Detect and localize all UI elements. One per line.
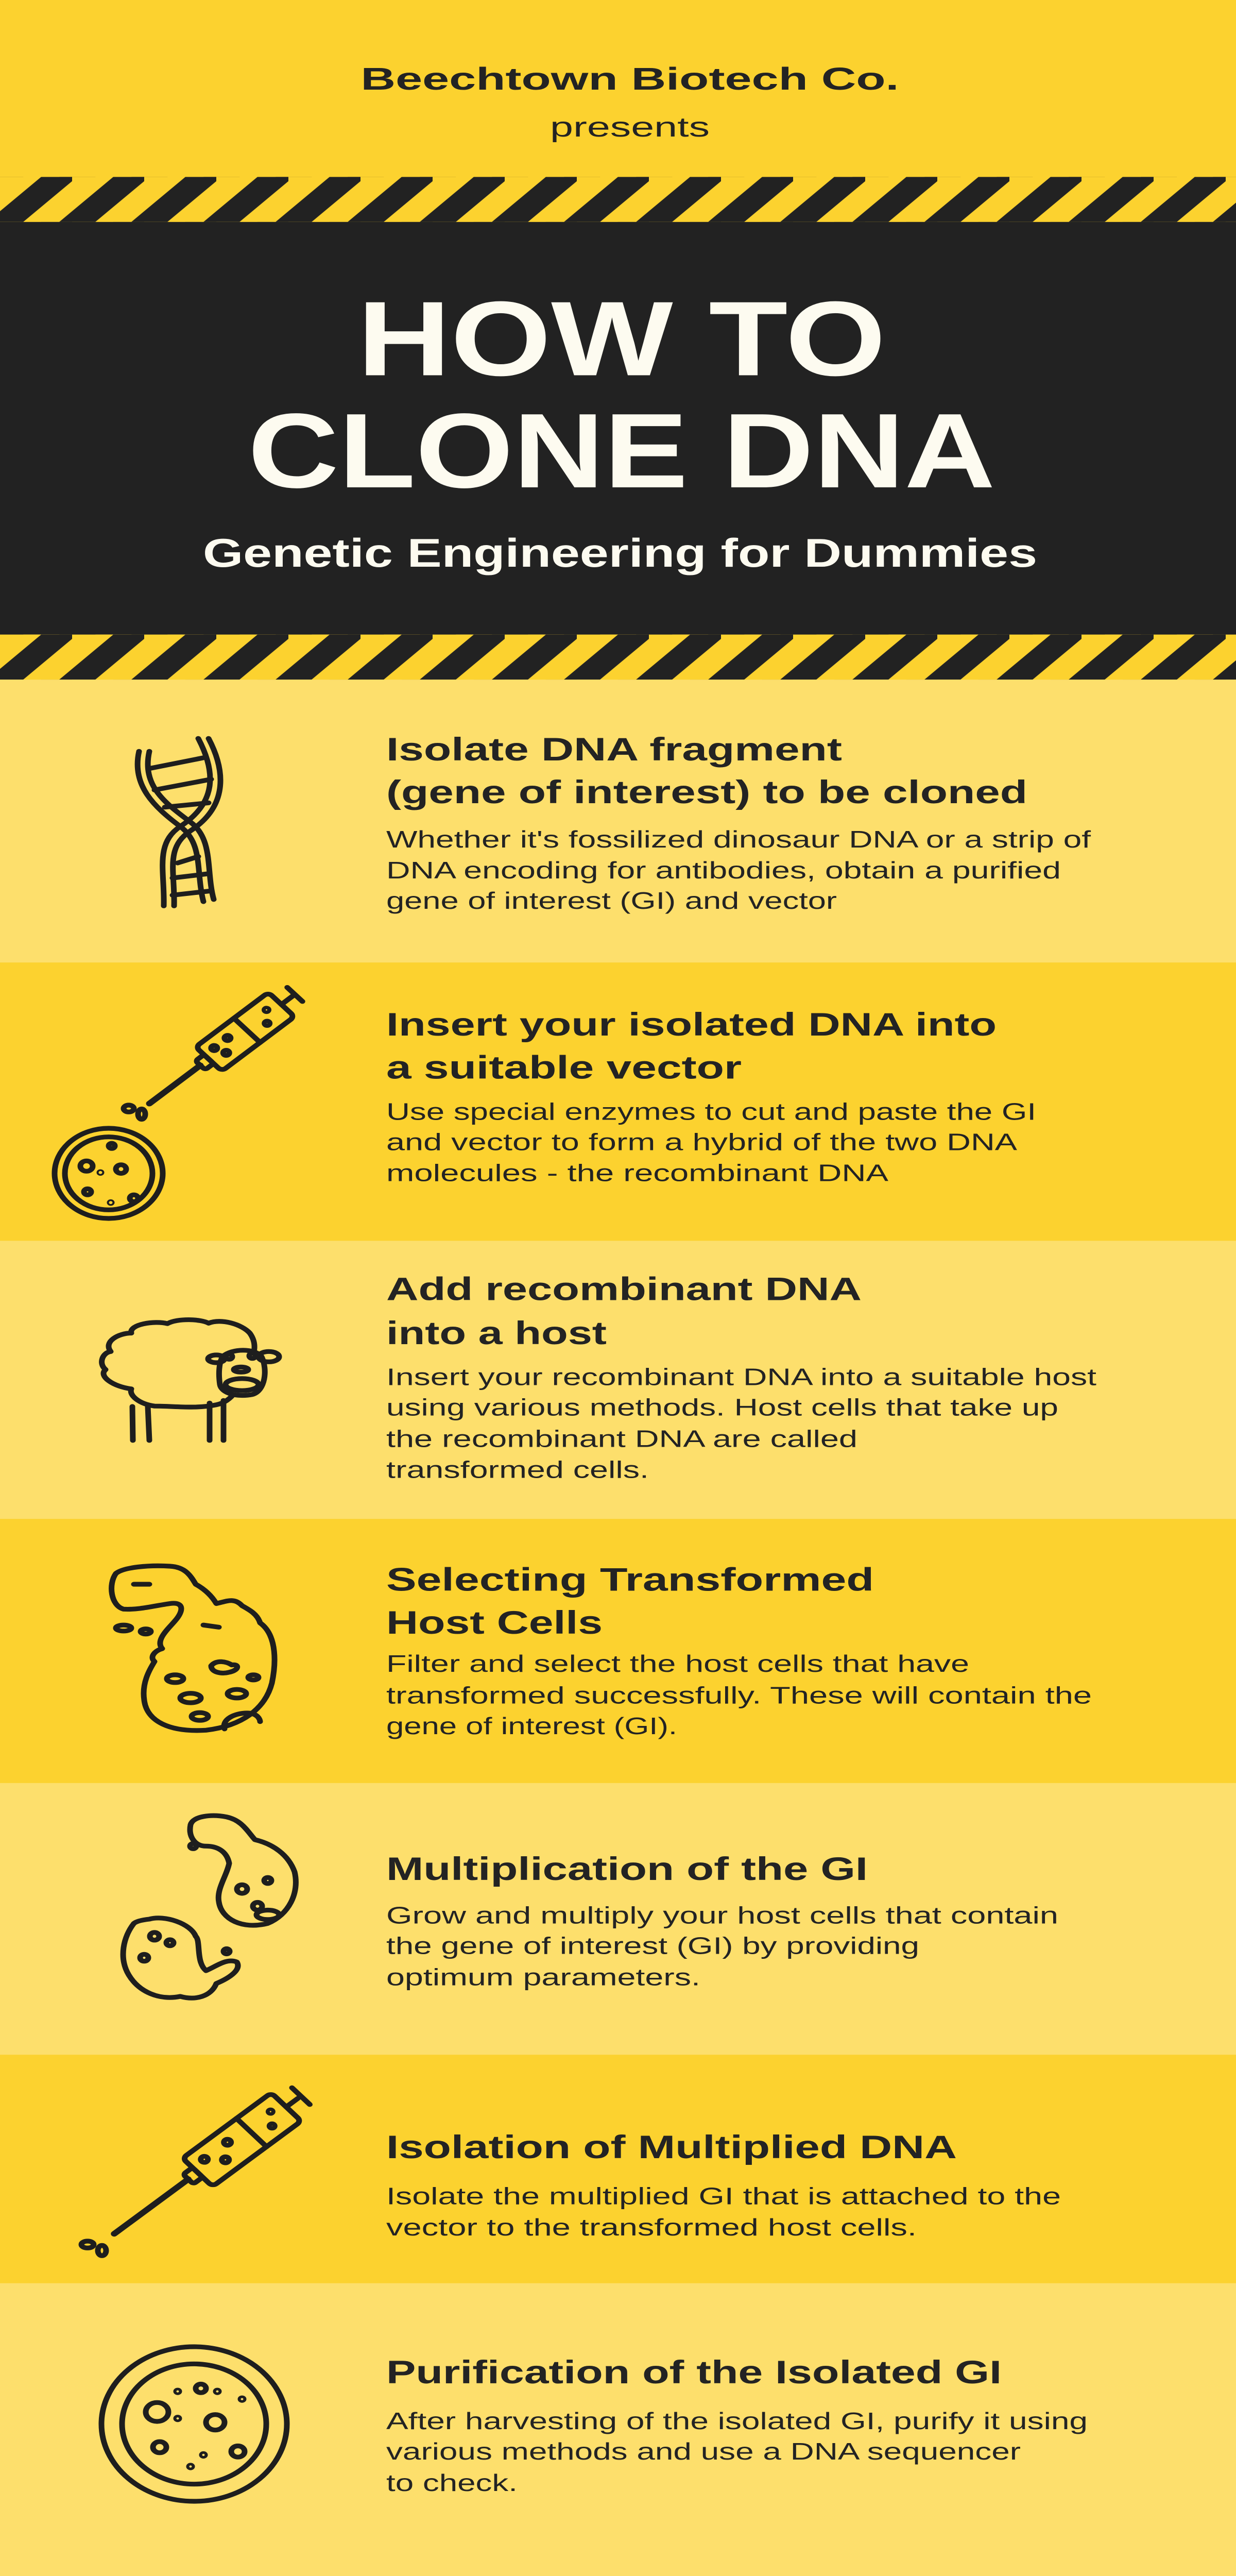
- panel: step 7: to check.: [386, 2469, 518, 2496]
- text block: Grow and multiply your host cells that contain: [386, 1902, 1058, 1928]
- text block: Whether it's fossilized dinosaur DNA or a strip of: [386, 825, 1091, 853]
- heading: Insert your isolated DNA into: [386, 1006, 997, 1043]
- panel: step 1: [0, 680, 1236, 962]
- subtitle: Genetic Engineering for Dummies: [203, 531, 1037, 575]
- panel: step 4: [0, 1519, 1236, 1783]
- panel: step 5: [0, 1783, 1236, 2055]
- icon: syringe: [81, 2082, 316, 2256]
- panel: step 6: vector to the transformed host cells.: [386, 2214, 917, 2241]
- text block: Use special enzymes to cut and paste the GI: [386, 1098, 1036, 1125]
- header band: [0, 0, 1236, 177]
- panel: step 2: [0, 962, 1236, 1241]
- heading: Add recombinant DNA: [386, 1270, 862, 1307]
- heading: Isolate DNA fragment: [386, 731, 842, 767]
- title panel: CLONE DNA: [248, 392, 995, 510]
- icon: sheep: [102, 1320, 279, 1440]
- panel: step 3: the recombinant DNA are called: [386, 1425, 857, 1452]
- title: HOW TO: [357, 280, 886, 398]
- panel: step 2: molecules - the recombinant DNA: [386, 1159, 889, 1186]
- panel: step 3: using various methods. Host cells that take up: [386, 1394, 1058, 1420]
- presents: presents: [550, 112, 710, 143]
- icon: syringe and petri dish: [55, 982, 308, 1218]
- icon: multiplying cells: [123, 1816, 296, 1998]
- panel: step 1: gene of interest (GI) and vector: [386, 887, 837, 914]
- title panel: [0, 222, 1236, 635]
- text block: After harvesting of the isolated GI, purify it using: [386, 2407, 1088, 2434]
- panel: step 5: the gene of interest (GI) by providing: [386, 1932, 919, 1959]
- panel: step 2: and vector to form a hybrid of the two DNA: [386, 1128, 1018, 1155]
- panel: step 4: Host Cells: [386, 1604, 603, 1640]
- heading: Multiplication of the GI: [386, 1851, 868, 1887]
- company name: Beechtown Biotech Co.: [360, 61, 899, 97]
- text block: Filter and select the host cells that have: [386, 1650, 969, 1677]
- panel: step 3: transformed cells.: [386, 1456, 649, 1483]
- icon: transformed cell: [112, 1566, 274, 1731]
- panel: step 4: transformed successfully. These will contain the: [386, 1682, 1092, 1709]
- heading: Isolation of Multiplied DNA: [386, 2129, 957, 2165]
- icon: petri dish: [101, 2347, 287, 2501]
- panel: step 5: optimum parameters.: [386, 1963, 700, 1990]
- panel: step 3: into a host: [386, 1315, 607, 1351]
- text block: Isolate the multiplied GI that is attached to the: [386, 2182, 1061, 2209]
- hazard stripes top: [0, 177, 1236, 222]
- panel: step 2: a suitable vector: [386, 1049, 742, 1086]
- panel: step 1: DNA encoding for antibodies, obtain a purified: [386, 856, 1061, 884]
- panel: step 4: gene of interest (GI).: [386, 1712, 677, 1739]
- panel: step 6: [0, 2055, 1236, 2283]
- hazard stripes bottom: [0, 635, 1236, 680]
- icon: DNA helix: [138, 738, 220, 906]
- heading: Selecting Transformed: [386, 1561, 874, 1598]
- heading: Purification of the Isolated GI: [386, 2354, 1002, 2390]
- panel: step 3: [0, 1241, 1236, 1519]
- panel: step 7: [0, 2283, 1236, 2576]
- panel: step 7: various methods and use a DNA sequencer: [386, 2438, 1021, 2465]
- panel: step 1: (gene of interest) to be cloned: [386, 774, 1027, 810]
- text block: Insert your recombinant DNA into a suitable host: [386, 1363, 1096, 1390]
